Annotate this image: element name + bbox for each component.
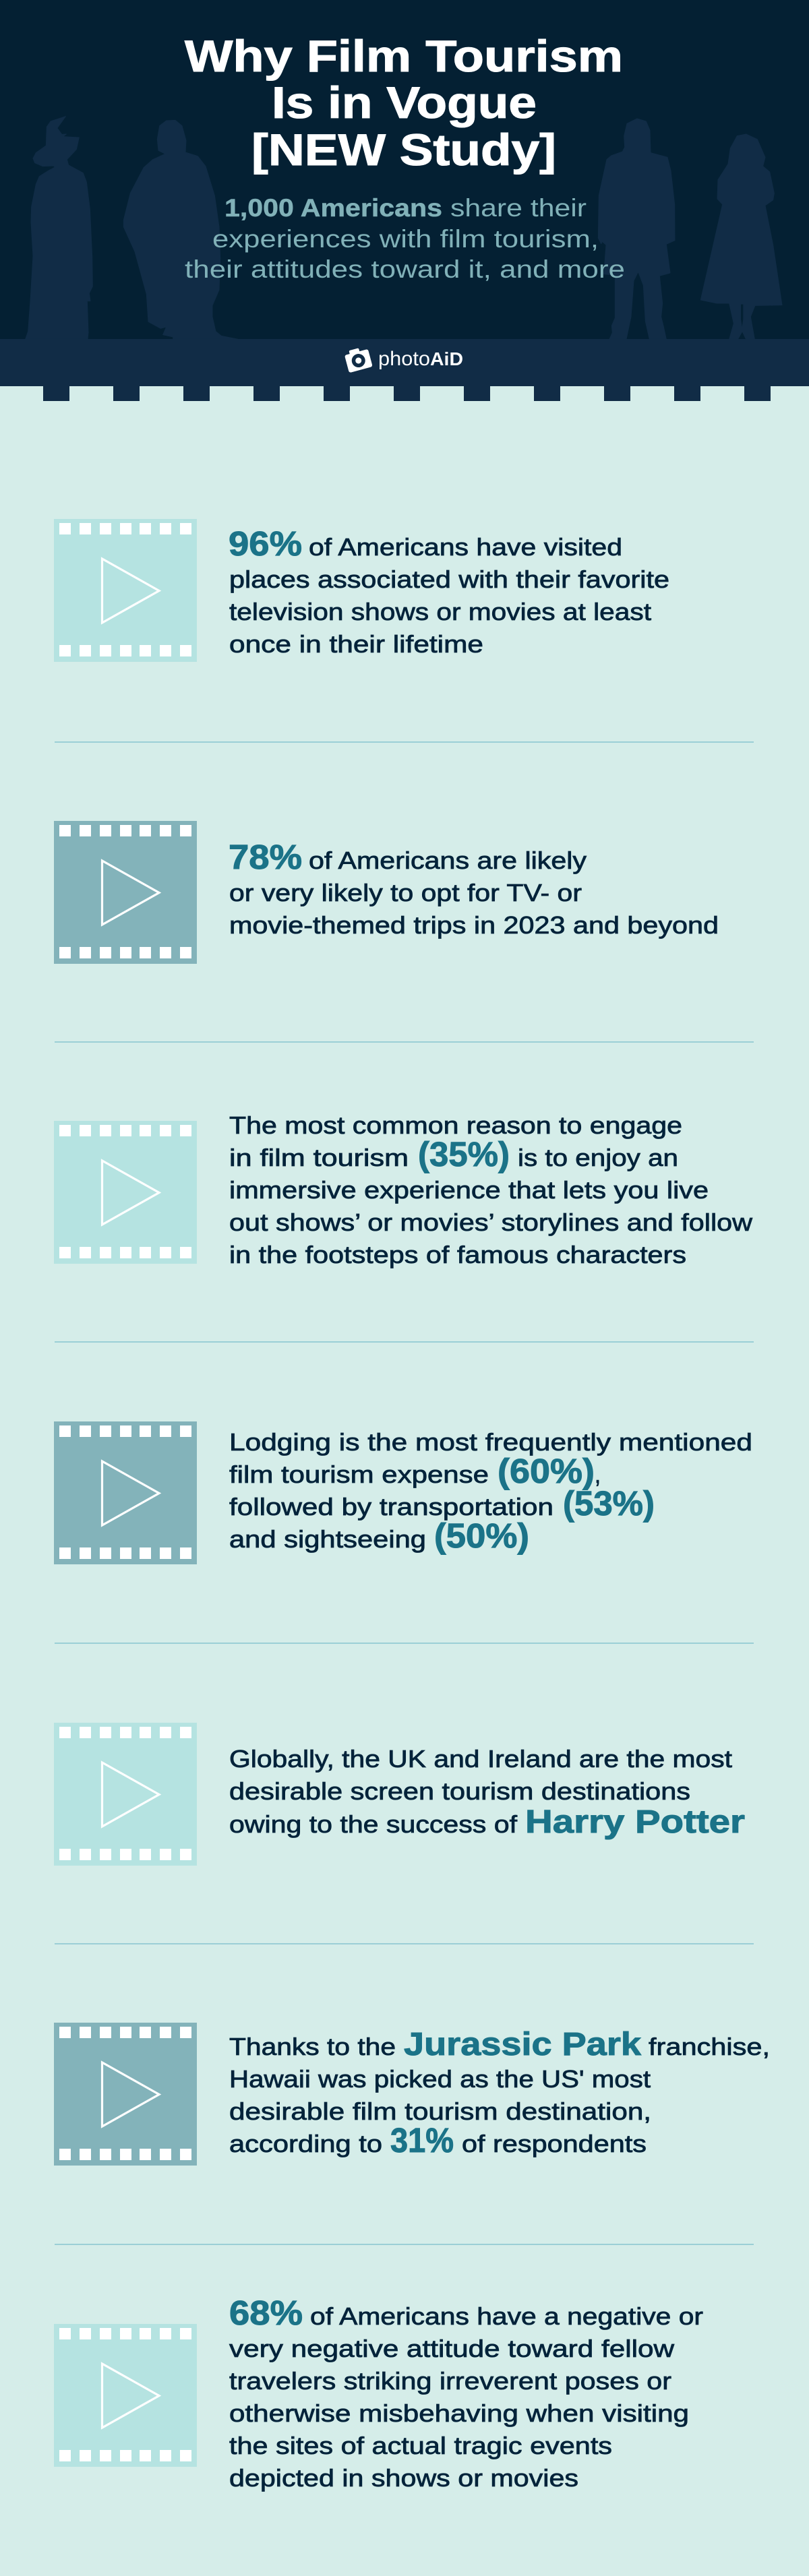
text: lodging expense: (50%)	[434, 1516, 529, 1555]
icon: film frame	[54, 1421, 197, 1564]
icon: camera	[344, 346, 373, 373]
silhouette: standing man	[598, 119, 675, 339]
text: lodging expense: ,	[595, 1461, 601, 1488]
silhouette: woman in dress	[700, 134, 782, 339]
text: 35% most common reason	[229, 1111, 753, 1268]
stat row 2	[54, 821, 719, 964]
logo: photoAiD: AiD	[430, 348, 463, 369]
text: Jurassic Park: according to	[229, 2130, 382, 2157]
icon: film frame	[54, 821, 197, 964]
text: 35% most common reason: The most common reason to engage	[229, 1111, 682, 1139]
text: 35% most common reason: in film tourism	[229, 1144, 409, 1171]
logo: photoAiD	[344, 346, 463, 373]
text: 35% most common reason: in the footsteps of famous characters	[229, 1241, 686, 1268]
text: Jurassic Park	[229, 2027, 770, 2159]
subtitle	[185, 194, 625, 283]
text: 68% negative: of Americans have a negative or	[310, 2302, 703, 2330]
text: 96% visited: television shows or movies at least	[229, 598, 651, 625]
footer band with film perforations	[0, 339, 809, 401]
silhouette: wizard	[26, 117, 92, 339]
text: lodging expense: Lodging is the most frequently mentioned	[229, 1428, 752, 1456]
title: [NEW Study]	[251, 125, 556, 175]
text: 96% visited	[229, 524, 669, 658]
stat row 6	[54, 2023, 770, 2166]
text: Harry Potter: owing to the success of	[229, 1810, 518, 1838]
icon: film frame	[54, 519, 197, 662]
stat row 7	[54, 2294, 703, 2492]
text: Harry Potter: Harry Potter	[525, 1804, 745, 1840]
text: 68% negative: the sites of actual tragic events	[229, 2432, 612, 2459]
subtitle: share their	[450, 194, 587, 222]
icon: film frame	[54, 2023, 197, 2166]
text: 78% likely	[229, 838, 719, 939]
text: 35% most common reason: (35%)	[418, 1135, 510, 1173]
subtitle: 1,000 Americans	[224, 194, 442, 222]
text: lodging expense: (60%)	[498, 1452, 595, 1490]
text: 96% visited: places associated with their favorite	[229, 565, 669, 593]
text: lodging expense: film tourism expense	[229, 1461, 489, 1488]
text: Harry Potter: desirable screen tourism destinations	[229, 1777, 690, 1805]
stat row 4	[54, 1421, 752, 1564]
text: Jurassic Park: franchise,	[649, 2033, 770, 2060]
text: Jurassic Park: Hawaii was picked as the US' most	[229, 2065, 651, 2093]
text: Jurassic Park: Jurassic Park	[404, 2027, 641, 2062]
text: 78% likely: or very likely to opt for TV- or	[229, 879, 582, 907]
text: lodging expense: followed by transportation	[229, 1493, 553, 1521]
text: 35% most common reason: immersive experience that lets you live	[229, 1176, 709, 1204]
text: lodging expense: and sightseeing	[229, 1525, 426, 1553]
text: 68% negative: depicted in shows or movies	[229, 2464, 578, 2492]
stat row 1	[54, 519, 669, 662]
text: Jurassic Park: desirable film tourism destination,	[229, 2097, 651, 2125]
stat row 5	[54, 1723, 745, 1866]
title	[185, 31, 623, 175]
text: lodging expense: (53%)	[563, 1484, 655, 1523]
text: 78% likely: 78%	[229, 838, 302, 876]
text: Jurassic Park: 31%	[390, 2121, 454, 2159]
text: 68% negative: very negative attitude toward fellow	[229, 2335, 675, 2362]
stat row 3	[54, 1111, 753, 1268]
header panel	[0, 0, 809, 401]
text: Jurassic Park: of respondents	[462, 2130, 647, 2157]
icon: film frame	[54, 2324, 197, 2467]
text: 68% negative: 68%	[229, 2294, 303, 2332]
text: 35% most common reason: out shows’ or movies’ storylines and follow	[229, 1208, 753, 1236]
subtitle: their attitudes toward it, and more	[185, 255, 625, 283]
text: Harry Potter: Globally, the UK and Ireland are the most	[229, 1745, 732, 1773]
text: 78% likely: movie-themed trips in 2023 and beyond	[229, 911, 719, 939]
logo: photoAiD: photo	[378, 348, 430, 370]
text: 35% most common reason: is to enjoy an	[518, 1144, 678, 1171]
silhouette: robed figure	[123, 120, 238, 339]
text: 68% negative: otherwise misbehaving when visiting	[229, 2399, 689, 2427]
subtitle: experiences with film tourism,	[212, 225, 599, 253]
title: Is in Vogue	[272, 78, 537, 127]
text: 68% negative	[229, 2294, 703, 2492]
icon: film frame	[54, 1723, 197, 1866]
title: Why Film Tourism	[185, 31, 623, 81]
text: Jurassic Park: Thanks to the	[229, 2033, 396, 2060]
text: 96% visited: 96%	[229, 524, 302, 563]
text: Harry Potter	[229, 1745, 745, 1840]
icon: film frame	[54, 1121, 197, 1264]
text: 78% likely: of Americans are likely	[309, 847, 587, 874]
text: 96% visited: once in their lifetime	[229, 630, 483, 658]
text: 68% negative: travelers striking irreverent poses or	[229, 2367, 671, 2395]
text: 96% visited: of Americans have visited	[309, 533, 622, 561]
text: lodging expense	[229, 1428, 752, 1555]
